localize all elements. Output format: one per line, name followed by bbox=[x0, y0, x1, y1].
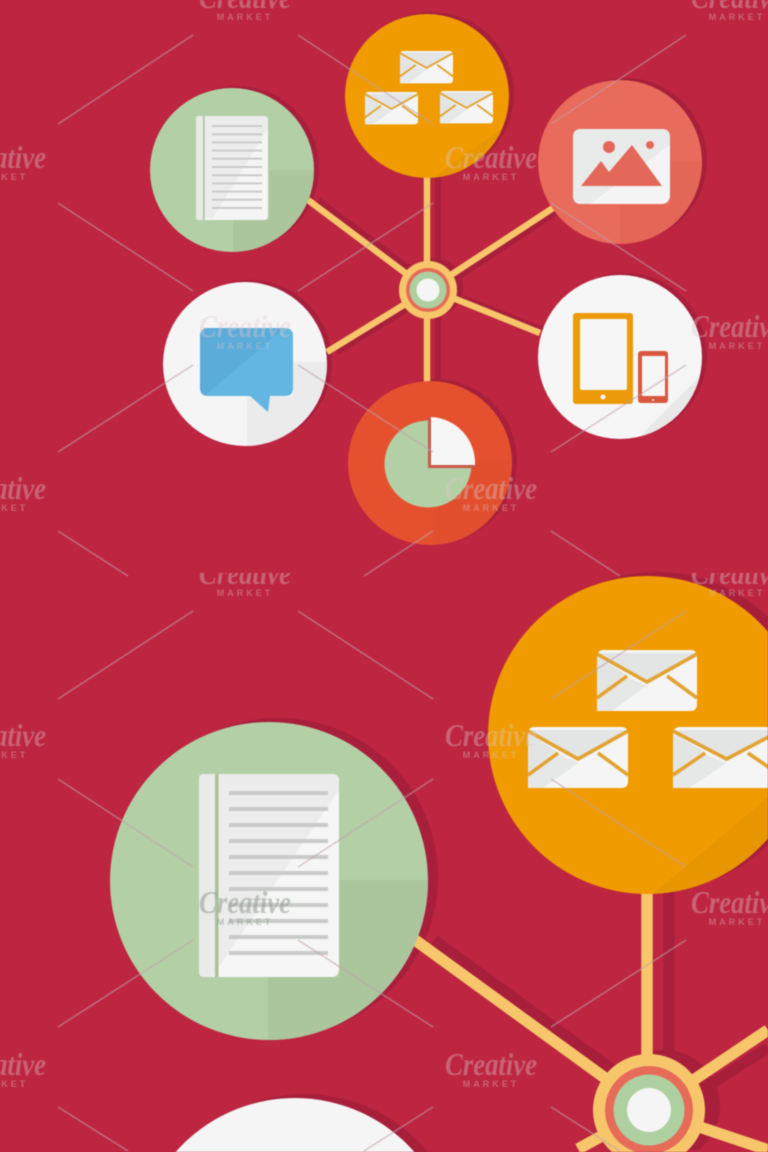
node: mail large bbox=[488, 576, 768, 894]
icon: envelopes large bbox=[528, 650, 768, 788]
watermark text: MARKET bbox=[217, 341, 273, 351]
node: chat bbox=[163, 282, 335, 450]
watermark text: MARKET bbox=[709, 588, 765, 598]
icon: tablet bbox=[573, 313, 633, 404]
spokes: upper network bbox=[308, 170, 553, 385]
watermark text: MARKET bbox=[217, 12, 273, 22]
watermark text: Creative bbox=[199, 884, 291, 920]
watermark text: Creative bbox=[445, 470, 537, 506]
node: pie chart bbox=[348, 381, 520, 550]
watermark text: MARKET bbox=[709, 341, 765, 351]
watermark text: Creative bbox=[445, 717, 537, 753]
icon: phone bbox=[638, 351, 668, 403]
watermark text: Creative bbox=[445, 139, 537, 175]
watermark text: MARKET bbox=[217, 588, 273, 598]
watermark text: MARKET bbox=[463, 503, 519, 513]
watermark text: Creative bbox=[445, 1046, 537, 1082]
icon: speech bubble bbox=[200, 328, 293, 412]
spoke shadows: lower network bbox=[434, 890, 768, 1150]
watermark lines bbox=[58, 35, 686, 1151]
node: document bbox=[150, 88, 320, 260]
watermark text: MARKET bbox=[217, 917, 273, 927]
hub: lower network bbox=[593, 1054, 705, 1152]
diagram: lower network bbox=[110, 572, 768, 1152]
diagram: upper network bbox=[150, 12, 710, 550]
node: mail bbox=[344, 13, 510, 178]
hub: upper network bbox=[399, 261, 457, 319]
watermark text: MARKET bbox=[709, 917, 765, 927]
icon: envelopes bbox=[365, 51, 493, 124]
icon: document large bbox=[199, 774, 339, 977]
node: document large bbox=[110, 722, 440, 1050]
watermark text: Creative bbox=[199, 308, 291, 344]
node: devices bbox=[538, 275, 704, 440]
node: chat large bbox=[176, 1098, 414, 1152]
icon: document bbox=[196, 116, 268, 220]
watermark text: MARKET bbox=[463, 750, 519, 760]
watermark text: MARKET bbox=[463, 1079, 519, 1089]
circle shadows: lower network bbox=[120, 572, 768, 1152]
spoke shadows: upper network bbox=[318, 170, 563, 385]
icon: pie chart bbox=[384, 416, 476, 508]
watermark text: MARKET bbox=[709, 12, 765, 22]
circle shadows: upper network bbox=[155, 12, 707, 543]
spokes: lower network bbox=[415, 890, 768, 1150]
icon: picture bbox=[573, 129, 670, 204]
node: image bbox=[538, 80, 710, 250]
watermark text: Creative bbox=[199, 555, 291, 591]
watermark text: MARKET bbox=[463, 172, 519, 182]
